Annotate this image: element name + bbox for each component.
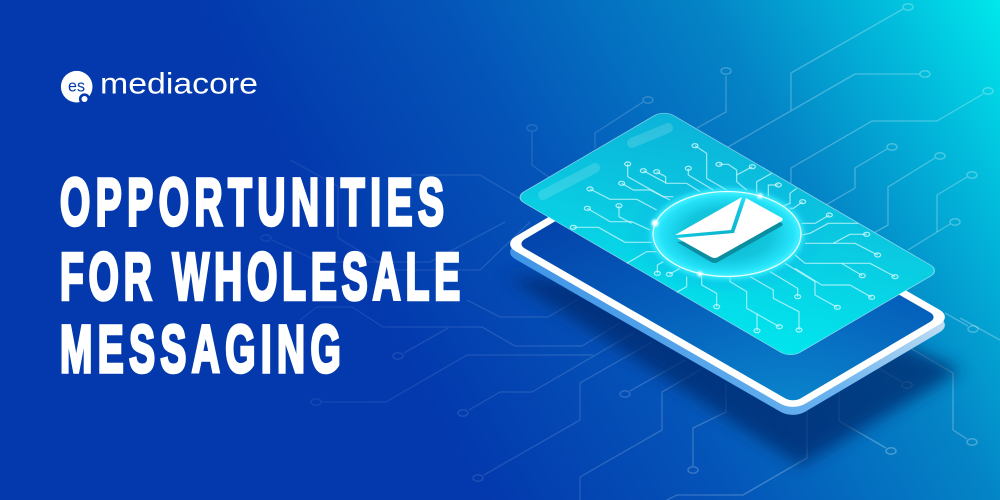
card placeholder bars [543,128,668,195]
title: FOR WHOLESALE [60,238,460,314]
title [60,164,460,387]
phone white frame [503,150,952,411]
background circuit lines [272,9,1000,500]
background circuit nodes [261,4,993,481]
card circuit traces [570,144,898,333]
phone shadow [505,275,962,466]
logo icon: es [68,76,85,96]
title: OPPORTUNITIES [60,164,444,240]
phone side edge [503,158,952,419]
floating circuit card [514,110,940,358]
glow halo [627,174,827,294]
card surface [514,110,940,358]
phone [503,150,952,419]
logo wordmark: mediacore [100,67,258,100]
glowing ring [652,191,801,277]
logo icon [61,71,92,105]
icon: envelope [675,197,783,263]
logo: mediacore [61,67,258,105]
phone screen [517,158,938,403]
title: MESSAGING [60,311,341,387]
